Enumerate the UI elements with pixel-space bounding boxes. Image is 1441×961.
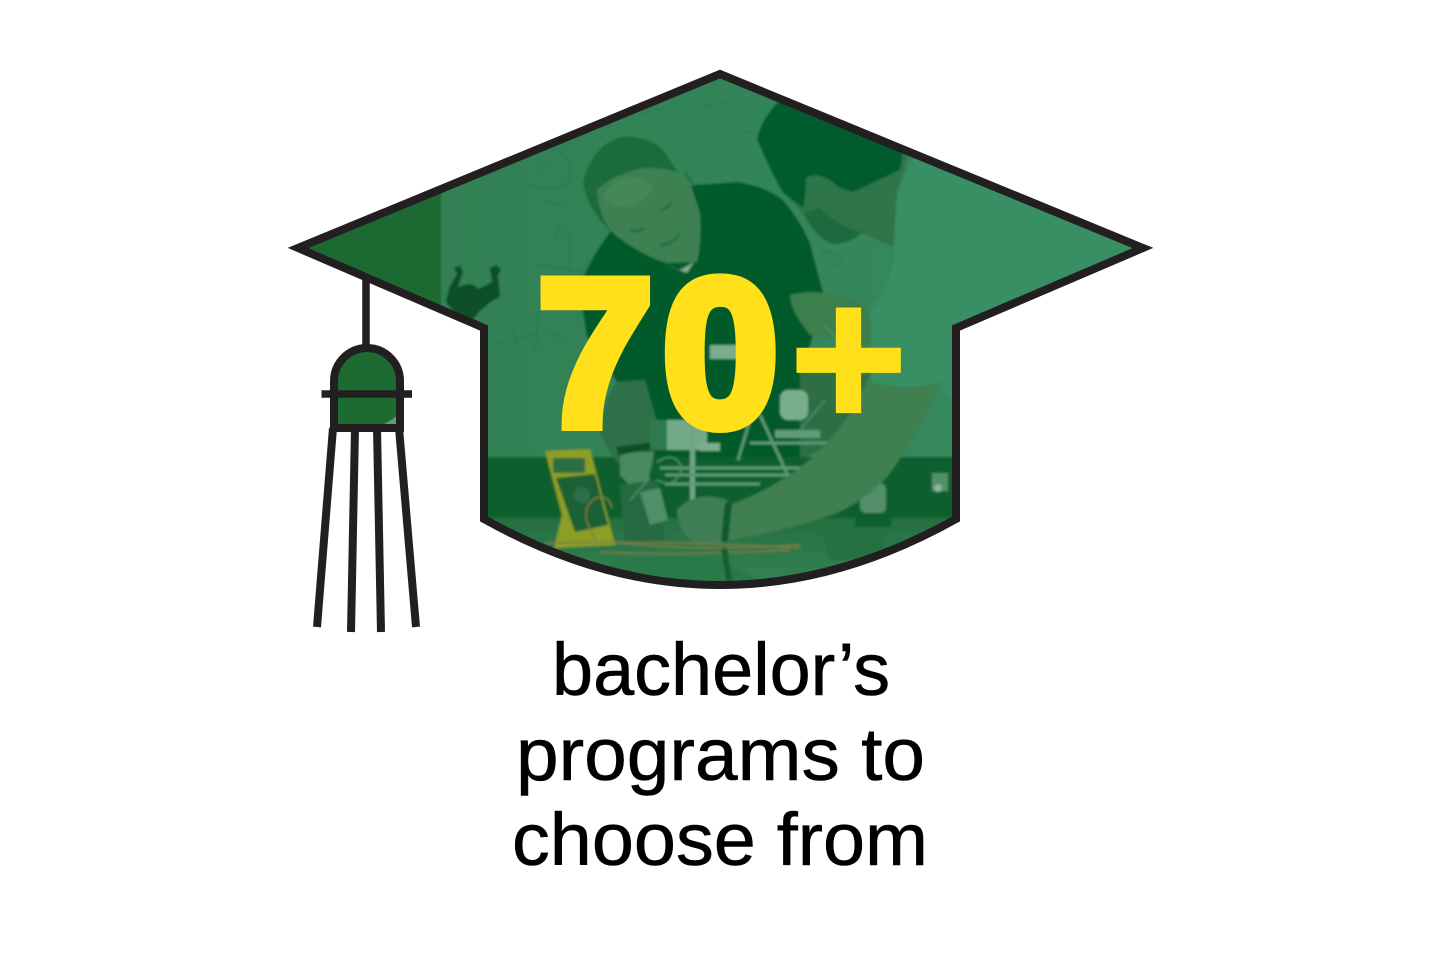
printer machine frame xyxy=(630,325,948,513)
big number: 70+: 70 xyxy=(537,236,779,470)
left man forearm xyxy=(600,380,658,470)
wires xyxy=(545,497,800,554)
right man face and neck xyxy=(787,153,908,246)
big number: 70+: + xyxy=(790,244,907,470)
whiteboard doodles xyxy=(514,132,760,340)
left man wristband and hand xyxy=(616,442,654,457)
right man beard xyxy=(803,208,862,244)
multimeter xyxy=(545,449,616,548)
right man ear xyxy=(807,178,826,208)
seated man torso below shirt xyxy=(800,372,872,460)
caption: bachelor's programs to choose from: choose from xyxy=(512,798,928,881)
right man hair xyxy=(756,102,904,208)
right man forearm xyxy=(727,373,940,540)
cap outline xyxy=(298,74,1143,585)
photo: two men working on electronics, green duotone xyxy=(308,78,1132,581)
tassel xyxy=(317,279,416,632)
seated man hair xyxy=(583,137,678,232)
big number: 70+ xyxy=(537,236,907,470)
fist xyxy=(790,292,872,345)
right man shirt xyxy=(870,308,877,382)
seated man shirt xyxy=(580,182,825,457)
seated man features xyxy=(630,172,693,245)
tassel cord xyxy=(362,279,370,346)
caption: bachelor's programs to choose from: bachelor’s xyxy=(552,628,890,711)
machine base xyxy=(620,480,665,545)
caption: bachelor's programs to choose from: programs to xyxy=(516,713,925,796)
table xyxy=(490,516,950,574)
forehead highlight xyxy=(601,172,655,212)
tassel bell xyxy=(338,352,396,424)
graduation cap with photo fill xyxy=(280,60,1160,600)
door at left xyxy=(308,194,442,305)
tassel band xyxy=(322,390,412,398)
seated man face xyxy=(597,168,701,263)
tassel fringe xyxy=(317,428,416,632)
table reflection xyxy=(643,573,754,581)
caption: bachelor's programs to choose from xyxy=(512,628,928,881)
lower dark band xyxy=(480,457,960,519)
bracelet xyxy=(721,502,732,542)
right man hand xyxy=(677,497,735,546)
statue xyxy=(446,265,501,323)
infographic canvas xyxy=(288,70,1154,866)
